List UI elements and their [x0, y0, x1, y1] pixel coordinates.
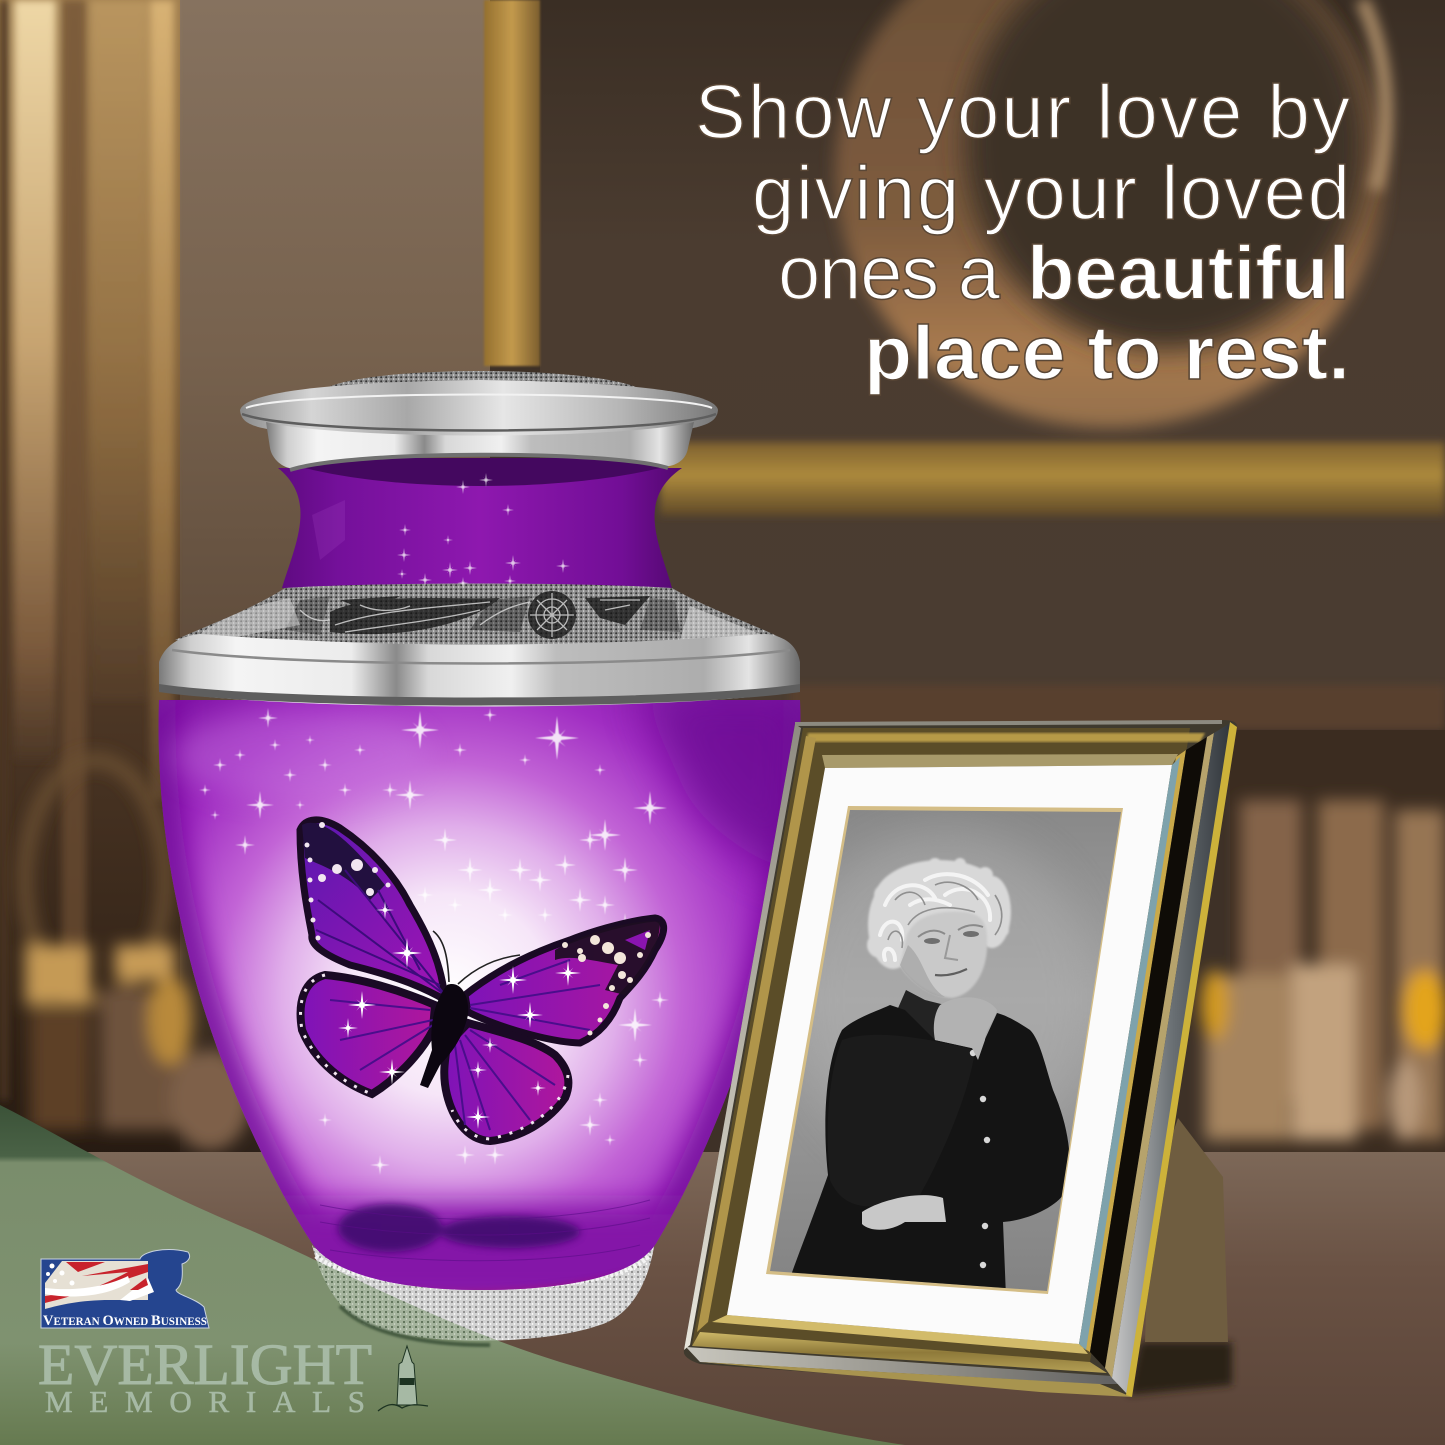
- picture frame stand: [1145, 1118, 1228, 1342]
- matte blue edge: [1079, 757, 1180, 1350]
- line four: place to rest.: [864, 311, 1350, 396]
- right tan band: [1105, 733, 1214, 1378]
- emphasis beautiful: beautiful: [1027, 231, 1350, 316]
- bottom gold lip: [700, 1362, 1132, 1397]
- rim shadow line: [159, 684, 800, 706]
- badge text: VETERAN OWNED BUSINESS: [43, 1313, 207, 1329]
- left silver edge: [684, 724, 801, 1350]
- right forewing: [465, 918, 664, 1043]
- top grey edge: [795, 720, 1222, 726]
- headline: [695, 70, 1350, 396]
- badge flag: [45, 1261, 154, 1309]
- line three: ones a: [778, 231, 1001, 316]
- icon: lighthouse: [378, 1346, 428, 1411]
- bottom silver band: [686, 1347, 1126, 1384]
- top inner bevel: [822, 754, 1178, 768]
- wing sparkles: [338, 901, 581, 1129]
- rim lip line: [172, 650, 790, 664]
- hair: [867, 858, 1011, 969]
- everlight wordmark: EVERLIGHT: [38, 1332, 372, 1397]
- picture frame: [684, 720, 1237, 1397]
- memorials wordmark: MEMORIALS: [45, 1384, 365, 1419]
- veteran owned business badge: [41, 1250, 209, 1329]
- butterfly: [300, 820, 664, 1141]
- gold moulding: [692, 728, 1190, 1362]
- urn silver rim: [159, 634, 800, 706]
- left hindwing: [301, 975, 435, 1094]
- right gold edge: [1126, 722, 1237, 1397]
- frame outer edge: [684, 720, 1237, 1397]
- neck sparkles: [397, 473, 570, 589]
- urn: [150, 371, 830, 1341]
- sleeve shading: [828, 1035, 975, 1206]
- right inner gold: [1080, 750, 1186, 1352]
- urn engraved shoulder: [175, 584, 785, 648]
- matte: [727, 765, 1172, 1344]
- urn base band: [312, 1240, 655, 1341]
- line two: giving your loved: [752, 151, 1350, 236]
- body sparkles: [199, 708, 669, 1175]
- green corner panel: [0, 1105, 905, 1445]
- chin hand: [934, 997, 997, 1060]
- urn base under green tint: [316, 1261, 496, 1348]
- butterfly body: [420, 984, 468, 1088]
- face: [900, 912, 987, 998]
- bottom gold bands: [712, 1315, 1088, 1354]
- top gold stripe: [806, 733, 1205, 742]
- left forewing: [300, 820, 445, 1000]
- photo bevel: [766, 806, 1123, 1294]
- left gold band: [697, 736, 816, 1332]
- buttons: [970, 1050, 990, 1268]
- antennae: [433, 931, 520, 984]
- portrait photo: [770, 810, 1121, 1291]
- stand shadow: [1128, 1342, 1232, 1395]
- right black band: [1090, 737, 1207, 1368]
- urn lid: [240, 371, 718, 470]
- lower hand: [862, 1195, 946, 1230]
- neck: [898, 990, 942, 1040]
- line one: Show your love by: [695, 70, 1350, 155]
- right grey band: [1112, 722, 1232, 1395]
- right hindwing: [444, 1023, 568, 1141]
- urn neck: [278, 458, 682, 588]
- cardigan: [790, 1005, 1070, 1297]
- urn body: [150, 690, 830, 1305]
- badge soldier silhouette: [41, 1250, 209, 1328]
